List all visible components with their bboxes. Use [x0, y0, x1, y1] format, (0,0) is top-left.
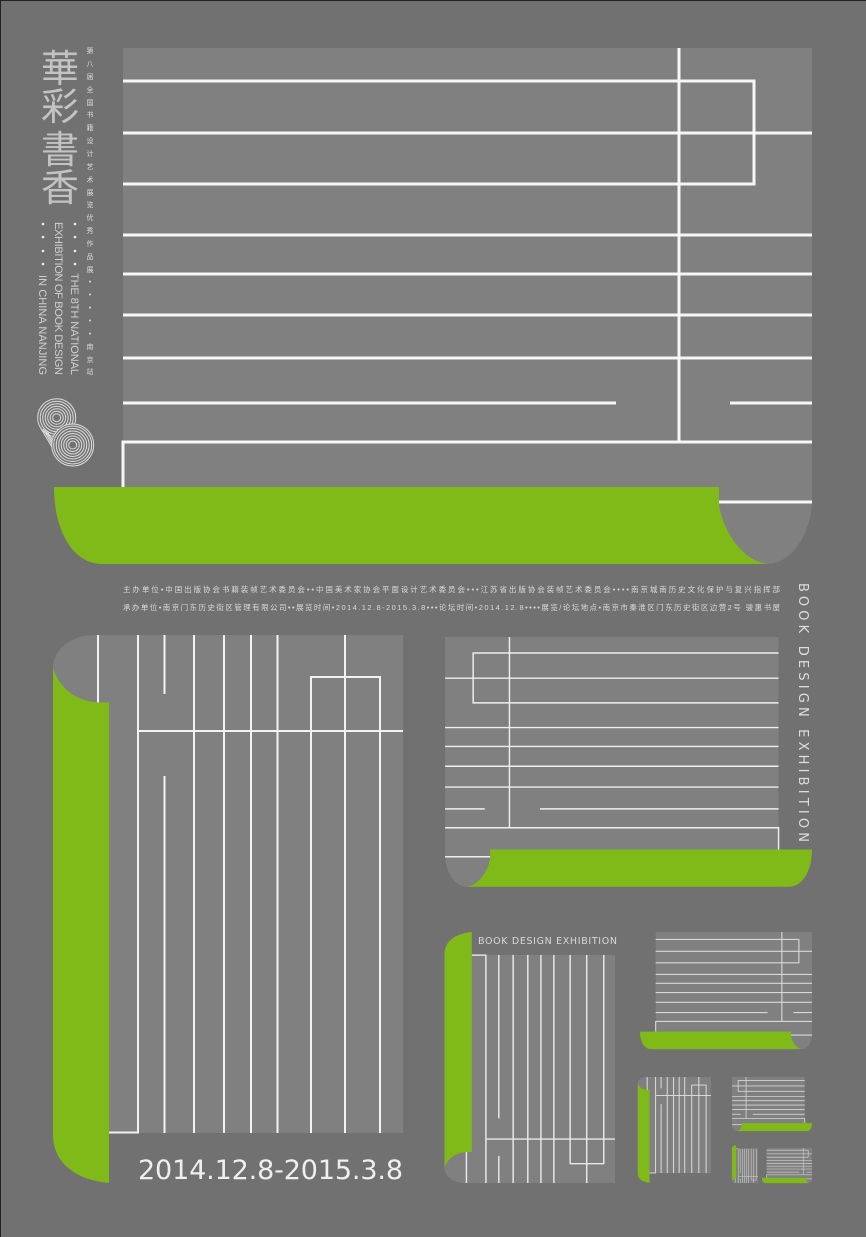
title: vertical calligraphic heading: 華彩書香	[41, 49, 79, 210]
text block: vertical English exhibition name	[36, 222, 80, 375]
icon: concentric line figure 8 logo	[38, 399, 94, 466]
panel: miniature mirrored landscape cover	[732, 1077, 812, 1131]
panel: miniature tall book cover	[638, 1077, 711, 1183]
text block: organisers line: 主办单位•中国出版协会书籍装帧艺术委员会••中国美术家协会平面设计艺术委员会•••江苏省出版协会装帧艺术委员会••••南京城南历史文化保护与复兴指挥部	[123, 584, 781, 594]
text block: vertical English exhibition name: IN CHINA NANJING	[36, 275, 48, 375]
text block: vertical English exhibition name: EXHIBITION OF BOOK DESIGN	[52, 222, 64, 375]
text block: vertical English exhibition name: THE 8TH NATIONAL	[68, 273, 80, 375]
panel: small tall book cover	[445, 932, 615, 1183]
panel: small landscape book cover	[640, 932, 812, 1049]
heading: small BOOK DESIGN EXHIBITION: BOOK DESIGN EXHIBITION	[478, 936, 617, 947]
panel: medium mirrored book cover	[445, 637, 812, 887]
panel: tiny landscape cover	[762, 1148, 812, 1183]
text block: dates and venue line: 承办单位•南京门东历史街区管理有限公司••展览时间•2014.12.8-2015.3.8•••论坛时间•2014.12.8••••展览/论坛地点•南京市秦淮区门东历史街区边营2号 骏惠书屋	[123, 602, 780, 612]
heading: vertical BOOK DESIGN EXHIBITION: BOOK DESIGN EXHIBITION	[795, 583, 810, 842]
panel: large book cover with green curled edge	[54, 48, 812, 564]
text block: vertical Chinese exhibition name: 第八届全国书籍设计艺术展览优秀作品展•••••南京站	[86, 46, 94, 376]
panel: tiny flipped tall cover	[732, 1145, 758, 1183]
panel: tall book cover with green spine	[53, 635, 403, 1183]
text block: exhibition dates: 2014.12.8-2015.3.8	[138, 1155, 403, 1186]
